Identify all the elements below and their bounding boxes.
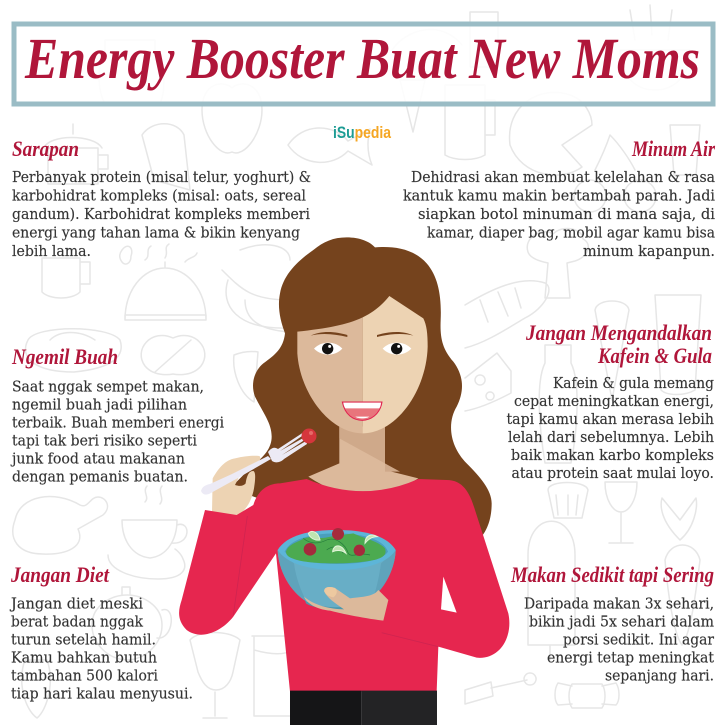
body: Kafein & Gula: atau protein saat mulai loyo.: [512, 466, 714, 482]
body: Ngemil Buah: terbaik. Buah memberi energi: [12, 416, 224, 432]
body: Kafein & Gula: Kafein & gula memang: [553, 376, 714, 392]
body: Kafein & Gula: tapi kamu akan merasa lebih: [506, 412, 714, 428]
trousers: [290, 691, 361, 725]
cucumber slices: [308, 531, 377, 553]
body: Sarapan: [12, 170, 311, 260]
salad bowl and holding hand: [278, 528, 396, 621]
body: Ngemil Buah: dengan pemanis buatan.: [12, 470, 188, 486]
body: Sarapan: Perbanyak protein (misal telur, yoghurt) &: [12, 170, 311, 186]
salad greens: [286, 533, 386, 563]
body: Minum Air: minum kapanpun.: [583, 244, 715, 260]
text block: Sarapan: [12, 136, 311, 260]
text block: Minum Air: [403, 136, 715, 260]
body: Jangan Diet: Kamu bahkan butuh: [11, 650, 157, 666]
heading: Sarapan: Sarapan: [12, 136, 79, 161]
body: Ngemil Buah: ngemil buah jadi pilihan: [12, 398, 187, 414]
body: Makan Sedikit tapi Sering: Daripada makan 3x sehari,: [524, 596, 714, 612]
sleeve seams: [233, 516, 438, 647]
text block: Jangan Mengandalkan Kafein & Gula: [506, 320, 714, 482]
heading: Jangan Mengandalkan Kafein & Gula: [525, 320, 712, 368]
body: Makan Sedikit tapi Sering: sepanjang hari.: [605, 668, 714, 684]
body: Makan Sedikit tapi Sering: [524, 596, 714, 684]
body: Ngemil Buah: junk food atau makanan: [10, 452, 185, 468]
shirt: [179, 479, 509, 725]
eyebrows: [311, 332, 347, 337]
body: Kafein & Gula: [506, 376, 714, 482]
body: Kafein & Gula: cepat meningkatkan energi,: [514, 394, 714, 410]
heading: Ngemil Buah: Ngemil Buah: [11, 344, 118, 369]
body: Kafein & Gula: lelah dari sebelumnya. Lebih: [508, 430, 714, 446]
fork: [201, 432, 307, 495]
cherry tomato on fork: [302, 428, 316, 444]
body: Ngemil Buah: [10, 380, 224, 486]
body: Makan Sedikit tapi Sering: porsi sedikit. Ini agar: [563, 632, 714, 648]
logo: isupedia: iSupedia: [333, 123, 391, 142]
body: Jangan Diet: berat badan nggak: [11, 614, 143, 630]
neck: [308, 427, 418, 495]
mouth: [342, 402, 382, 420]
body: Minum Air: Dehidrasi akan membuat kelelahan & rasa: [411, 170, 715, 186]
holding hand: [304, 587, 388, 621]
body: Jangan Diet: [9, 596, 193, 702]
body: Kafein & Gula: baik makan karbo kompleks: [511, 448, 714, 464]
red tomatoes: [304, 528, 365, 556]
body: Minum Air: kantuk kamu makin bertambah parah. Jadi: [403, 188, 715, 204]
body: Sarapan: lebih lama.: [12, 244, 91, 260]
arm gap: [441, 577, 457, 613]
body: Jangan Diet: tambahan 500 kalori: [11, 668, 158, 684]
body: Sarapan: gandum). Karbohidrat kompleks memberi: [12, 207, 310, 223]
body: Makan Sedikit tapi Sering: energi tetap meningkat: [547, 650, 714, 666]
eyes: [314, 343, 411, 355]
text block: Ngemil Buah: [10, 344, 224, 486]
body: Sarapan: karbohidrat kompleks (misal: oats, sereal: [12, 188, 306, 204]
hair: [235, 237, 492, 537]
left hand: [212, 456, 260, 516]
body: Makan Sedikit tapi Sering: bikin jadi 5x sehari dalam: [529, 614, 714, 630]
body: Jangan Diet: tiap hari kalau menyusui.: [11, 686, 193, 702]
body: Ngemil Buah: Saat nggak sempet makan,: [12, 380, 204, 396]
body: Jangan Diet: Jangan diet meski: [9, 596, 143, 612]
face: [297, 317, 363, 433]
illustration: woman eating salad: [179, 237, 509, 725]
heading: Jangan Diet: Jangan Diet: [10, 562, 110, 587]
body: Sarapan: energi yang tahan lama & bikin kenyang: [12, 226, 300, 242]
text block: Jangan Diet: [9, 562, 193, 702]
body: Minum Air: siapkan botol minuman di mana saja, di: [418, 207, 715, 223]
body: Minum Air: kamar, diaper bag, mobil agar kamu bisa: [427, 226, 715, 242]
body: Ngemil Buah: tapi tak beri risiko seperti: [12, 434, 197, 450]
body: Minum Air: [403, 170, 715, 260]
text block: Makan Sedikit tapi Sering: [510, 562, 714, 684]
body: Jangan Diet: turun setelah hamil.: [11, 632, 156, 648]
